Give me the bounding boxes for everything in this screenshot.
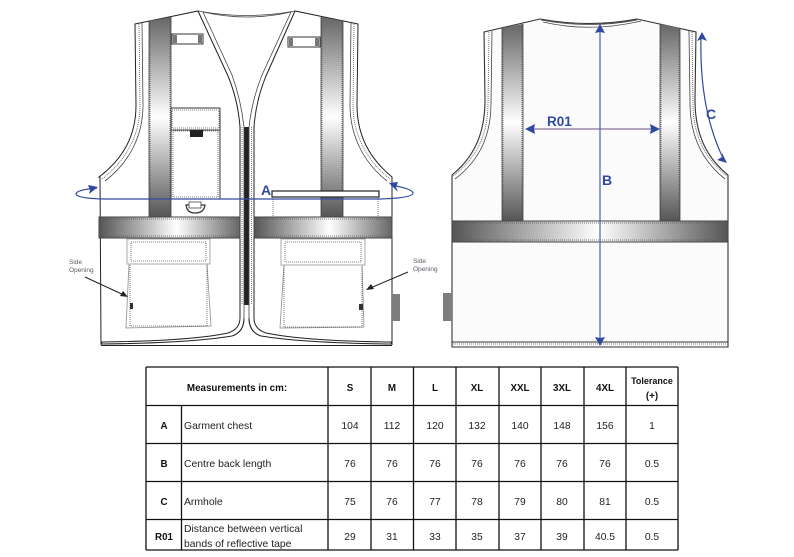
back vest illustration (443, 19, 728, 347)
row C armhole: Armhole (184, 497, 223, 508)
side opening label right (366, 258, 438, 290)
back length arrow B (595, 24, 612, 346)
row A garment chest (160, 421, 655, 432)
chest measurement arrow A (76, 182, 413, 199)
reflective tape distance arrow R01 (525, 114, 660, 134)
side opening label right: Side (413, 258, 426, 265)
table header row: Measurements in cm: (187, 383, 287, 394)
chest welt pocket (272, 191, 379, 217)
row R01 distance between bands: R01 (155, 532, 174, 543)
row R01 distance between bands: 31 (386, 532, 398, 543)
row C armhole (160, 497, 659, 508)
row R01 distance between bands: Distance between vertical (184, 524, 302, 535)
front vest illustration (99, 11, 400, 346)
vertical reflective bands (149, 17, 343, 217)
row B centre back length: 76 (471, 459, 483, 470)
row B centre back length: B (160, 459, 168, 470)
row A garment chest: Garment chest (184, 421, 252, 432)
table header row: Tolerance (631, 376, 673, 386)
armhole arrow C (697, 32, 727, 163)
D ring (186, 202, 205, 213)
row R01 distance between bands: 29 (344, 532, 356, 543)
row A garment chest: 140 (511, 421, 529, 432)
zipper (242, 127, 252, 320)
row R01 distance between bands (155, 524, 659, 550)
back length arrow B: B (602, 172, 612, 188)
row R01 distance between bands: 33 (429, 532, 441, 543)
back armhole bindings (455, 31, 725, 179)
row R01 distance between bands: 37 (514, 532, 526, 543)
back brand tag (443, 293, 452, 321)
row A garment chest: 112 (384, 421, 400, 432)
row B centre back length: 76 (429, 459, 441, 470)
row C armhole: 80 (556, 497, 568, 508)
back horizontal reflective band (452, 221, 728, 242)
row R01 distance between bands: bands of reflective tape (184, 539, 292, 550)
row C armhole: C (160, 497, 168, 508)
chest pocket (171, 108, 220, 199)
left lower pocket (126, 239, 211, 328)
back hem (452, 342, 728, 344)
armhole arrow C: C (706, 106, 716, 122)
back vest outline (452, 19, 728, 347)
side opening label left (69, 259, 128, 297)
row A garment chest: 104 (341, 421, 359, 432)
right lower pocket (280, 239, 365, 328)
hem outer line (101, 318, 392, 346)
row R01 distance between bands: 0.5 (645, 532, 659, 543)
row C armhole: 76 (386, 497, 398, 508)
row A garment chest: A (160, 421, 168, 432)
table header row (187, 376, 673, 402)
collar and V neck bindings (198, 11, 295, 127)
row B centre back length: 76 (386, 459, 398, 470)
row C armhole: 81 (599, 497, 611, 508)
table header row: M (388, 383, 396, 394)
side opening label left: Opening (69, 267, 94, 274)
back vertical reflective bands (502, 24, 680, 221)
row B centre back length: Centre back length (184, 459, 271, 470)
row C armhole: 75 (344, 497, 356, 508)
row B centre back length: 76 (344, 459, 356, 470)
table header row: L (432, 383, 438, 394)
row C armhole: 78 (471, 497, 483, 508)
row B centre back length: 76 (599, 459, 611, 470)
row C armhole: 79 (514, 497, 526, 508)
table header row: XL (471, 383, 483, 394)
armhole bindings (105, 23, 387, 181)
side opening label left: Side (69, 259, 82, 266)
brand tag (392, 294, 400, 321)
row R01 distance between bands: 40.5 (595, 532, 615, 543)
row A garment chest: 148 (553, 421, 571, 432)
back collar (541, 20, 641, 27)
row R01 distance between bands: 35 (471, 532, 483, 543)
table header row: (+) (646, 391, 658, 402)
row B centre back length (160, 459, 659, 470)
table grid (146, 367, 678, 550)
table header row: 3XL (553, 383, 571, 394)
row A garment chest: 132 (468, 421, 486, 432)
row B centre back length: 0.5 (645, 459, 659, 470)
row B centre back length: 76 (556, 459, 568, 470)
side opening label right: Opening (413, 266, 438, 273)
front vest right panel outline (254, 11, 392, 345)
row C armhole: 0.5 (645, 497, 659, 508)
row A garment chest: 156 (596, 421, 614, 432)
front vest left panel outline (99, 11, 240, 345)
row A garment chest: 1 (649, 421, 655, 432)
horizontal reflective bands (99, 217, 392, 238)
row R01 distance between bands: 39 (556, 532, 568, 543)
table header row: 4XL (596, 383, 614, 394)
row A garment chest: 120 (426, 421, 444, 432)
reflective tape distance arrow R01: R01 (547, 114, 572, 129)
row B centre back length: 76 (514, 459, 526, 470)
table header row: S (347, 383, 354, 394)
table header row: XXL (510, 383, 530, 394)
name tabs (172, 34, 320, 47)
row C armhole: 77 (429, 497, 441, 508)
size table (146, 367, 678, 550)
chest measurement arrow A: A (261, 182, 271, 198)
